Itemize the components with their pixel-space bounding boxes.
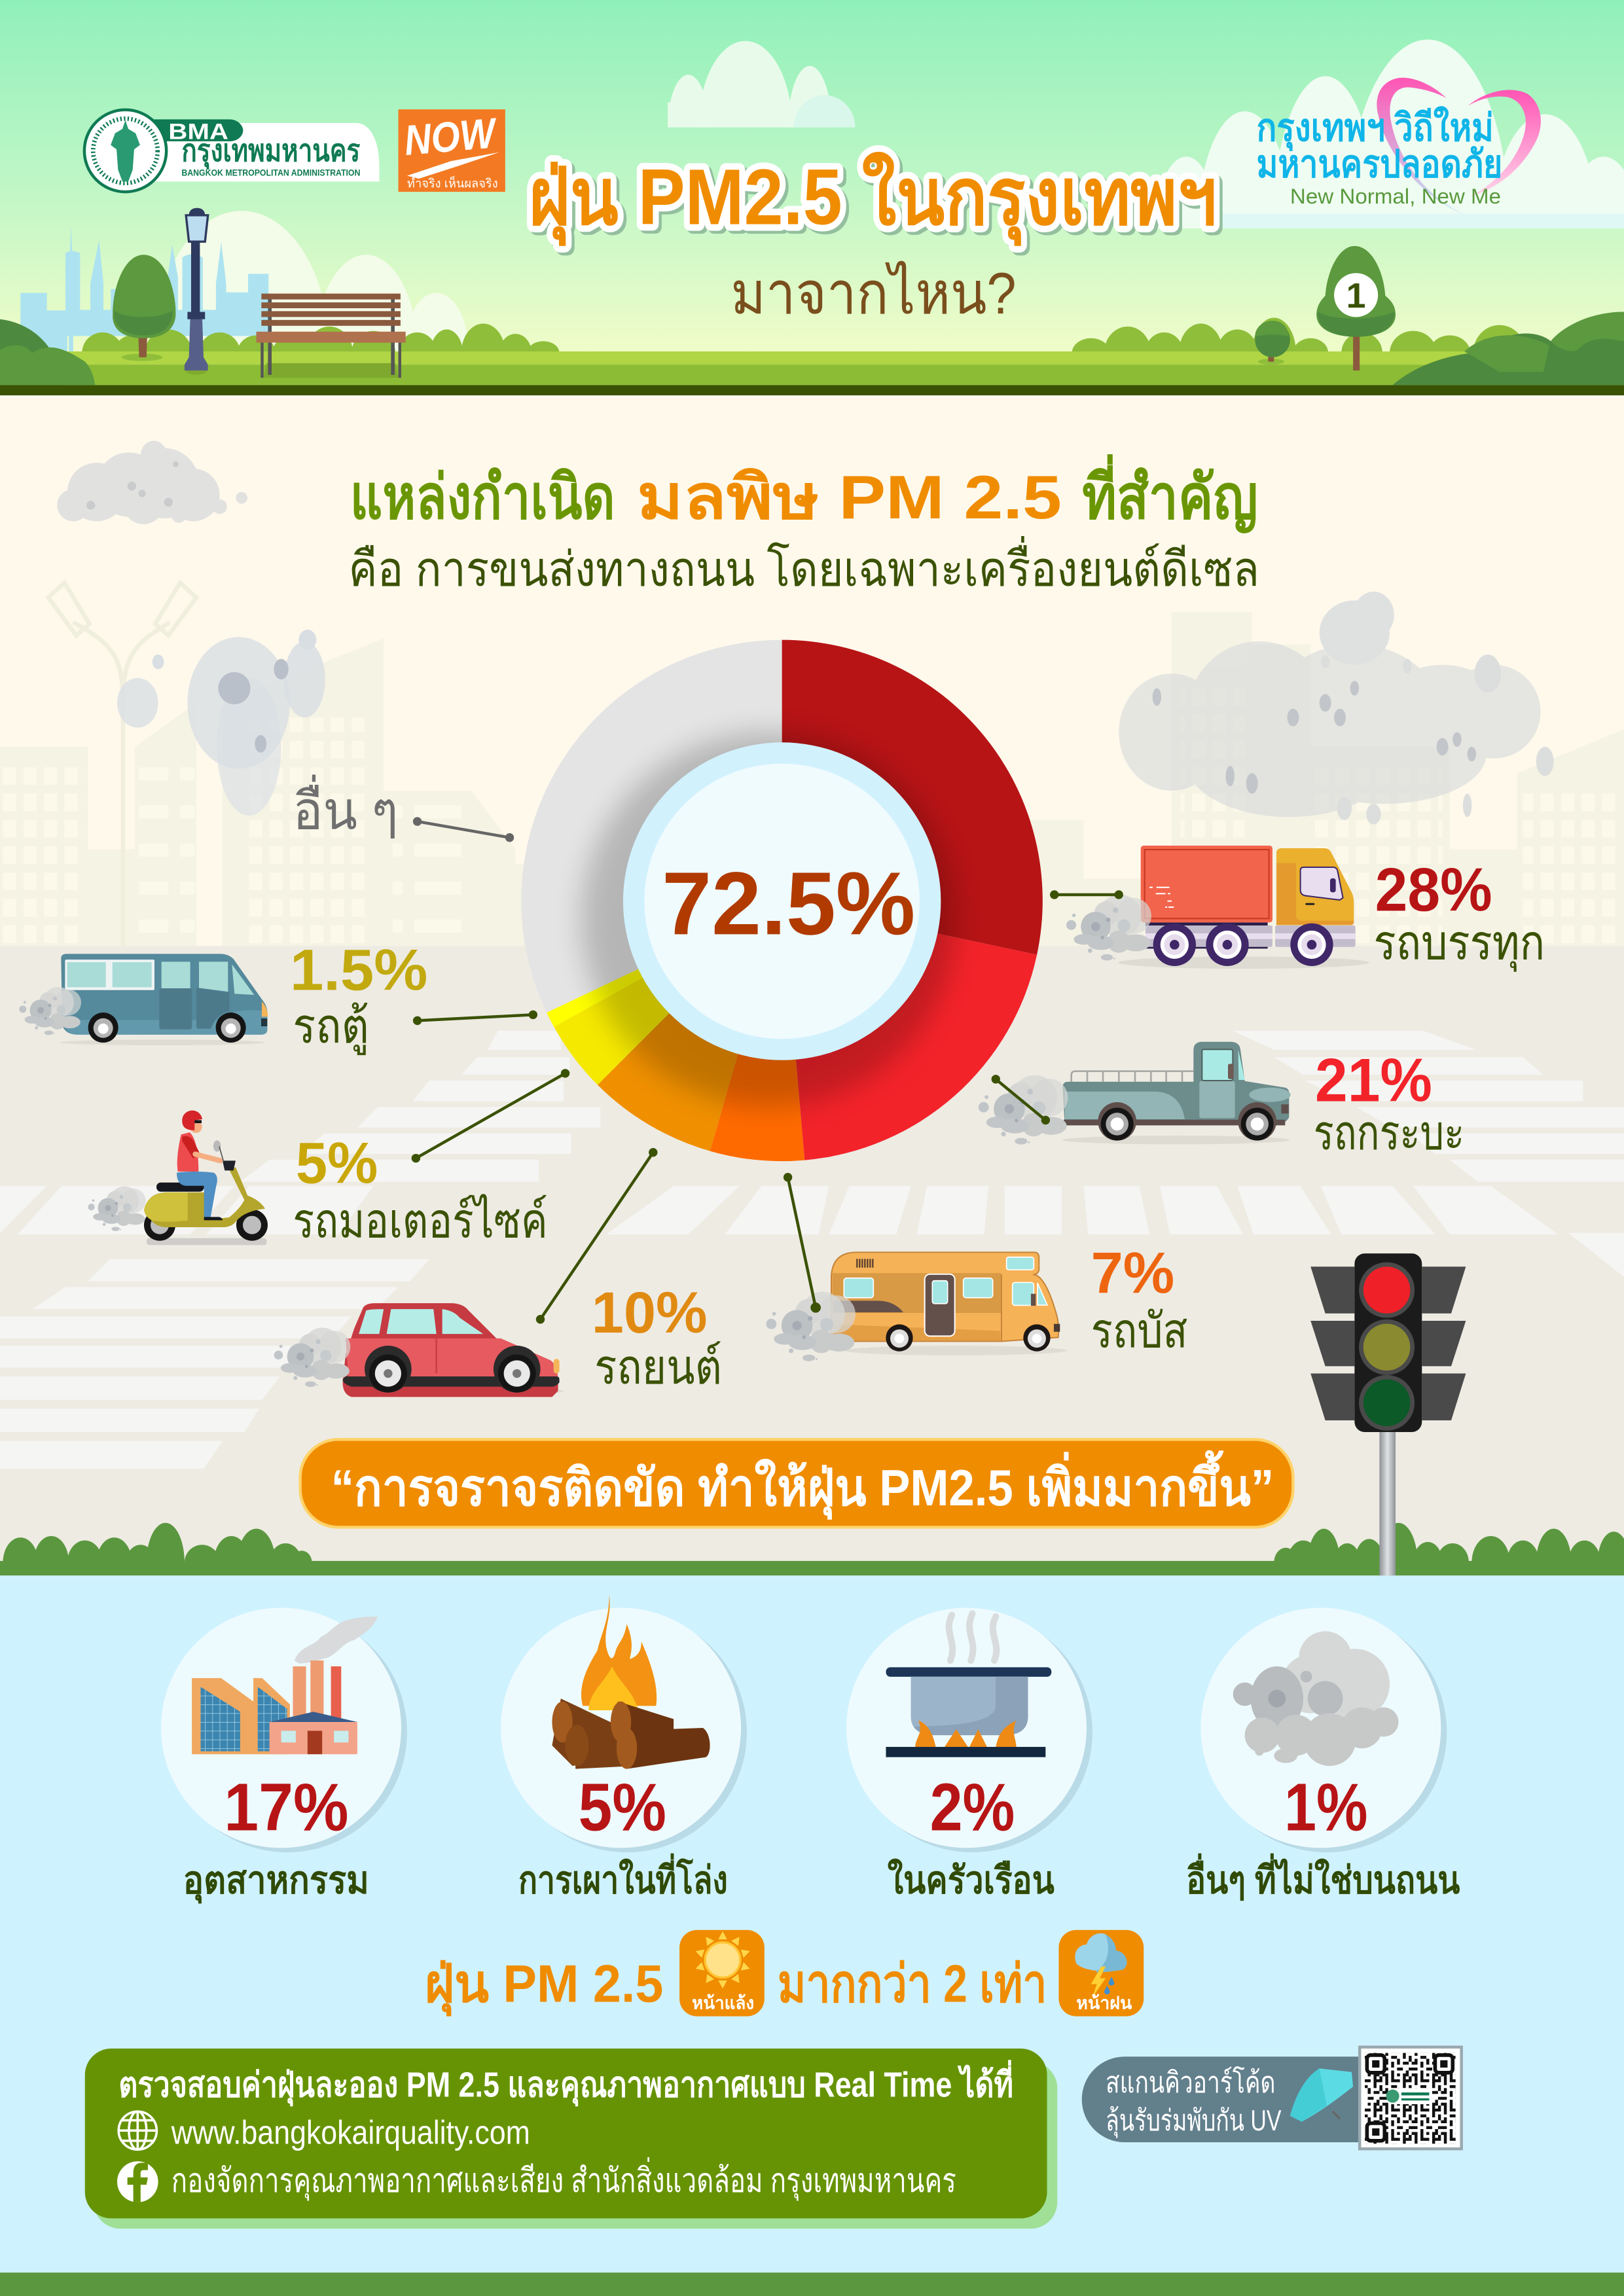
logo: BMA Bangkok Metropolitan Administration: กรุงเทพมหานคร: [181, 133, 360, 170]
donut chart: road transport 72.5%: [521, 640, 1043, 1161]
BMA seal: [84, 110, 166, 192]
icon: fire and logs: [552, 1594, 710, 1769]
icon: globe: [118, 2111, 156, 2149]
section heading: คือ การขนส่งทางถนน โดยเฉพาะเครื่องยนต์ดีเซล: [348, 536, 1259, 596]
card: household: [846, 1607, 1092, 1902]
pickup value and label: 21%: [1315, 1045, 1432, 1114]
logo: Bangkok new way heart: กรุงเทพฯ วิถีใหม่: [1256, 105, 1494, 152]
icon: facebook: [117, 2161, 158, 2202]
leader line: truck: [1050, 890, 1123, 899]
car value and label: 10%: [592, 1280, 708, 1345]
card: open burning: [501, 1594, 747, 1902]
leader line: others: [413, 817, 514, 842]
logo: Bangkok new way heart: มหานครปลอดภัย: [1256, 143, 1502, 186]
card: other non-road: [1186, 1607, 1460, 1902]
car exhaust: [274, 1327, 350, 1387]
street lamp: [185, 208, 208, 375]
panel: QR code promo: ลุ้นรับร่มพับกัน UV: [1106, 2104, 1282, 2138]
van value and label: [290, 937, 427, 1055]
skyline: [20, 226, 268, 351]
ground: [0, 351, 1624, 395]
card: industry: [161, 1607, 407, 1905]
city smoke: right large cloud: [1119, 592, 1554, 825]
main section background: cream sky: [0, 395, 1624, 946]
left tree: [113, 255, 175, 361]
panel: QR code promo: สแกนคิวอาร์โค้ด: [1106, 2066, 1276, 2099]
icon: rain cloud, rainy season: [1058, 1930, 1144, 2017]
logo: NOW moving forward: ทำจริง เห็นผลจริง: [407, 175, 498, 190]
bottom strip: [0, 2272, 1624, 2296]
icon: factory: [192, 1617, 378, 1754]
left foreground bushes: [0, 319, 95, 385]
lower section background: [0, 1575, 1624, 2272]
label: others: อื่น ๆ: [293, 774, 399, 840]
vehicle: pickup: [1062, 1042, 1291, 1144]
leader line: motorcycle: [412, 1069, 569, 1162]
badge number: [1334, 273, 1378, 317]
background bushes: [82, 318, 1519, 351]
callout: traffic jams: [300, 1439, 1293, 1527]
card: industry: 17%: [224, 1770, 348, 1845]
panel: real-time air quality check: [85, 2049, 1057, 2229]
truck value and label: 28%: [1375, 855, 1492, 924]
logo: NOW moving forward: [399, 109, 505, 192]
logo: Bangkok new way heart: [1256, 78, 1541, 219]
logo: BMA Bangkok Metropolitan Administration: BMA: [168, 120, 228, 145]
van value and label: รถตู้: [293, 999, 369, 1055]
icon: sun, dry season: [679, 1930, 765, 2017]
slice: motorcycle 5%: [554, 901, 782, 1085]
card: industry: อุตสาหกรรม: [183, 1859, 369, 1905]
card: other non-road: อื่นๆ ที่ไม่ใช่บนถนน: [1186, 1854, 1460, 1902]
slice: van 1.5%: [547, 901, 782, 1027]
pickup value and label: รถกระบะ: [1314, 1105, 1464, 1160]
section heading: มลพิษ PM 2.5: [637, 463, 1062, 531]
bus exhaust: [766, 1292, 856, 1361]
hedge and strip: [0, 1522, 1624, 1576]
background city silhouette: [0, 612, 1624, 946]
motorcycle value and label: [293, 1130, 548, 1247]
right small tree: [1255, 321, 1290, 365]
logo: Bangkok new way heart: New Normal, New Me: [1290, 185, 1501, 208]
vehicle: truck: [1118, 846, 1369, 969]
pickup exhaust: [979, 1075, 1068, 1145]
traffic light: [1310, 1253, 1466, 1575]
centre value: 72.5%: [662, 853, 915, 953]
park bench: [257, 294, 406, 378]
vehicle: motorcycle rider: [144, 1111, 268, 1245]
city smoke: left cloud: [117, 630, 325, 816]
logo: BMA Bangkok Metropolitan Administration: [84, 110, 379, 192]
bus value and label: รถบัส: [1091, 1303, 1187, 1357]
icon: rain cloud, rainy season: หน้าฝน: [1076, 1993, 1132, 2013]
QR code: [1360, 2047, 1462, 2149]
card: household: ในครัวเรือน: [888, 1858, 1055, 1902]
bus value and label: 7%: [1091, 1240, 1174, 1305]
leader line: van: [413, 1011, 537, 1025]
truck value and label: รถบรรทุก: [1373, 915, 1545, 972]
amber lamp: [1363, 1323, 1410, 1371]
comparison row: dry season vs rainy season: [425, 1930, 1144, 2017]
motorcycle exhaust: [88, 1187, 146, 1231]
panel: QR code promo: [1082, 2047, 1462, 2149]
right foreground bushes: [1393, 312, 1624, 385]
slice: truck 28%: [782, 640, 1043, 955]
pickup value and label: [1314, 1045, 1464, 1160]
truck exhaust: [1066, 895, 1151, 961]
motorcycle value and label: 5%: [296, 1130, 378, 1196]
centre disc: [623, 742, 941, 1060]
car value and label: [592, 1280, 722, 1394]
bus value and label: [1091, 1240, 1187, 1357]
logo: NOW moving forward: moving forward: [424, 148, 474, 166]
leader line: car: [536, 1148, 657, 1323]
logo: NOW moving forward: NOW: [403, 109, 499, 164]
title: ฝุ่น PM2.5 ในกรุงเทพฯ: [529, 151, 1217, 246]
card: open burning: 5%: [579, 1770, 666, 1845]
leader line: bus: [784, 1173, 821, 1313]
right tree with page number: [1316, 246, 1396, 370]
comparison row: dry season vs rainy season: ฝุ่น PM 2.5: [425, 1954, 663, 2017]
slice: pickup 21%: [782, 901, 1037, 1160]
header background: sky: [0, 0, 1624, 353]
slice: others: [521, 640, 782, 1013]
icon: umbrella: [1290, 2068, 1353, 2122]
car value and label: รถยนต์: [594, 1340, 722, 1394]
leader line: pickup: [992, 1075, 1050, 1124]
section heading: [348, 454, 1259, 596]
red lamp: [1363, 1266, 1410, 1314]
slice: bus 7%: [710, 901, 804, 1161]
department: กองจัดการคุณภาพอากาศและเสียง สำนักสิ่งแวดล้อม กรุงเทพมหานคร: [171, 2157, 956, 2201]
panel heading: ตรวจสอบค่าฝุ่นละออง PM 2.5 และคุณภาพอากาศแบบ Real Time ได้ที่: [118, 2060, 1013, 2107]
icon: sun, dry season: หน้าแล้ง: [692, 1993, 754, 2013]
road surface: [0, 946, 1624, 1575]
background street lamp silhouette: [48, 583, 196, 946]
card: open burning: การเผาในที่โล่ง: [518, 1854, 728, 1902]
icon: smoke cloud: [1233, 1631, 1398, 1766]
vehicle: car: [342, 1303, 564, 1397]
header clouds: [154, 39, 1624, 492]
city smoke: top-left small cloud: [57, 440, 247, 524]
vehicle: bus: [831, 1252, 1067, 1355]
card: other non-road: 1%: [1284, 1770, 1367, 1845]
badge number: 1: [1346, 276, 1366, 315]
slice: car 10%: [598, 901, 782, 1151]
icon: cooking pot: [886, 1613, 1051, 1757]
website: www.bangkokairquality.com: [171, 2113, 530, 2151]
motorcycle value and label: รถมอเตอร์ไซค์: [293, 1193, 548, 1247]
green lamp: [1363, 1379, 1410, 1426]
section heading: ที่สำคัญ: [1082, 454, 1258, 534]
title: มาจากไหน?: [731, 260, 1017, 326]
comparison row: dry season vs rainy season: มากกว่า 2 เท่า: [778, 1954, 1047, 2013]
van value and label: 1.5%: [290, 937, 427, 1002]
section heading: แหล่งกำเนิด: [350, 463, 615, 531]
logo: BMA Bangkok Metropolitan Administration: BANGKOK METROPOLITAN ADMINISTRATION: [181, 168, 360, 177]
title: [529, 151, 1217, 326]
van exhaust: [19, 987, 81, 1035]
vehicle: van: [60, 954, 268, 1045]
callout: traffic jams: “การจราจรติดขัด ทำให้ฝุ่น PM2.5 เพิ่มมากขึ้น”: [331, 1450, 1274, 1520]
inner shadow: [581, 732, 956, 1107]
truck value and label: [1373, 855, 1545, 972]
crosswalk stripes: [0, 1031, 1624, 1469]
card: household: 2%: [930, 1770, 1015, 1845]
